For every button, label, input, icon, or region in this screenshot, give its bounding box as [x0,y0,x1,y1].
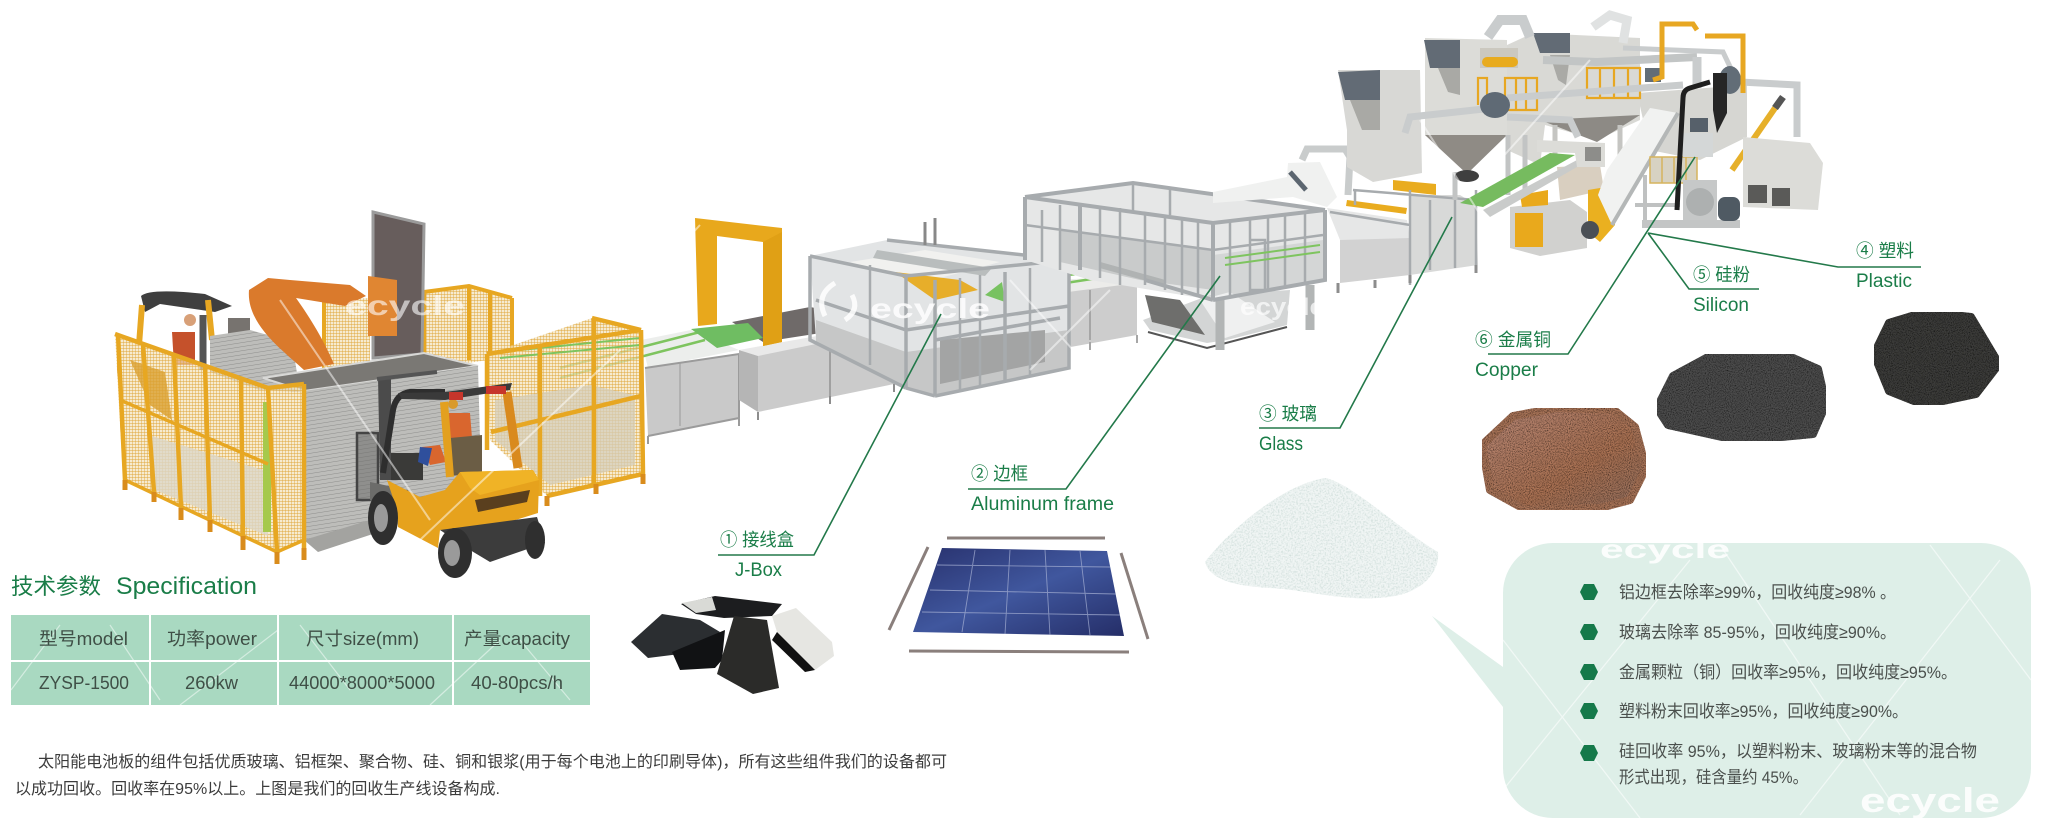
right chamber [1637,85,1747,160]
plastic pile [1874,312,1999,405]
callout 5: silicon: Silicon [1693,295,1749,316]
mill and black pipe [1642,73,1740,228]
edge removal frame machine [1025,183,1325,350]
grey shredder base and belt cover [1510,165,1615,256]
watermarks over machines: ecycle [870,293,990,324]
left fence [115,334,304,564]
callout 3: glass [1259,217,1452,455]
bullet list: 铝边框去除率≥99%，回收纯度≥98% 。 [1619,583,1896,602]
specification table: 260kw [185,673,239,693]
J-box photo [631,596,834,694]
right section: dust collectors and separators [1338,15,1823,256]
dust collector 2 [1424,38,1525,200]
white inclined conveyor [1598,108,1697,225]
third conveyor box [1000,263,1160,372]
framed laminate machine [810,218,1069,396]
specification table: ZYSP-1500 [39,673,129,693]
watermarks over machines: ecycle [1240,294,1325,321]
separator [1743,137,1823,210]
recovery rates speech bubble: ecycle [1860,782,2000,820]
door panel [368,212,424,358]
callout 5: silicon: ⑤ 硅粉 [1693,265,1750,285]
callout 2: aluminum frame [968,276,1220,515]
grey ducts [1405,15,1797,137]
washing section [1327,180,1478,293]
bullet list: 硅回收率 95%，以塑料粉末、玻璃粉末等的混合物 [1619,742,1977,761]
back fence [324,286,513,370]
callout 4: plastic: ④ 塑料 [1856,241,1914,261]
callout 2: aluminum frame: ② 边框 [971,464,1028,484]
left cage, forklifts and robot [115,212,643,578]
callout 6: copper [1475,157,1695,381]
callout 1: J-Box: ① 接线盒 [720,530,794,550]
callout 6: copper: Copper [1475,360,1539,381]
specification table [11,615,590,705]
first conveyor box [560,330,739,444]
big ribbed container [263,353,482,552]
dust collector 3 [1507,33,1640,170]
description paragraph [15,753,947,798]
callout 2: aluminum frame: Aluminum frame [971,494,1114,515]
callout 1: J-Box: J-Box [735,560,782,581]
right fence [487,318,643,506]
copper pile [1482,408,1646,510]
silicon pile [1657,354,1826,441]
front forklift [357,372,545,578]
callout 4: plastic [1648,233,1921,292]
specification table: 型号model [39,629,128,649]
specification table: 尺寸size(mm) [306,629,419,649]
callout 6: copper: ⑥ 金属铜 [1475,330,1551,350]
bullet list: 金属颗粒（铜）回收率≥95%，回收纯度≥95%。 [1619,663,1957,682]
recovery rates speech bubble [1432,534,2031,820]
yellow gantry [691,218,782,348]
watermarks over machines [280,60,1590,540]
blue fans [1480,66,1741,118]
bullet list: 形式出现，硅含量约 45%。 [1619,768,1808,787]
callout 3: glass: Glass [1259,434,1303,455]
yellow duct [1653,24,1743,93]
solar panel photo with frame bars [889,538,1148,652]
watermarks over machines: ecycle [345,290,465,321]
heading: specification: 技术参数 [11,574,101,599]
production line: conveyor and machine section [560,149,1478,444]
small grey box [210,330,300,392]
callout 4: plastic: Plastic [1856,271,1912,292]
green inclined belt [1460,140,1605,217]
bullet list [1580,583,1977,787]
specification table: 40-80pcs/h [471,673,563,693]
bullet list: 玻璃去除率 85-95%，回收纯度≥90%。 [1619,623,1896,642]
dust collector 1 [1338,70,1422,182]
yellow guard rails [1478,68,1640,110]
rear forklift [139,291,250,370]
specification table: 产量capacity [464,629,570,649]
yellow auger [1732,108,1775,170]
callout 1: J-Box [718,314,941,581]
heading: specification: Specification [116,573,257,600]
description paragraph: 以成功回收。回收率在95%以上。上图是我们的回收生产线设备构成. [15,780,500,798]
specification table: 44000*8000*5000 [289,673,435,693]
bullet list: 塑料粉末回收率≥95%，回收纯度≥90%。 [1619,702,1908,721]
recovery rates speech bubble: ecycle [1600,534,1730,564]
specification table: 功率power [167,629,257,649]
glass pile [1205,478,1438,598]
second conveyor box [732,307,894,420]
callout 3: glass: ③ 玻璃 [1259,404,1317,424]
white incline and duct [1213,149,1350,207]
heading: specification [11,573,257,600]
description paragraph: 太阳能电池板的组件包括优质玻璃、铝框架、聚合物、硅、铜和银浆(用于每个电池上的印刷导体)，所有这些组件我们的设备都可 [38,753,947,771]
callout 5: silicon [1648,233,1759,316]
robot arm [249,278,366,370]
